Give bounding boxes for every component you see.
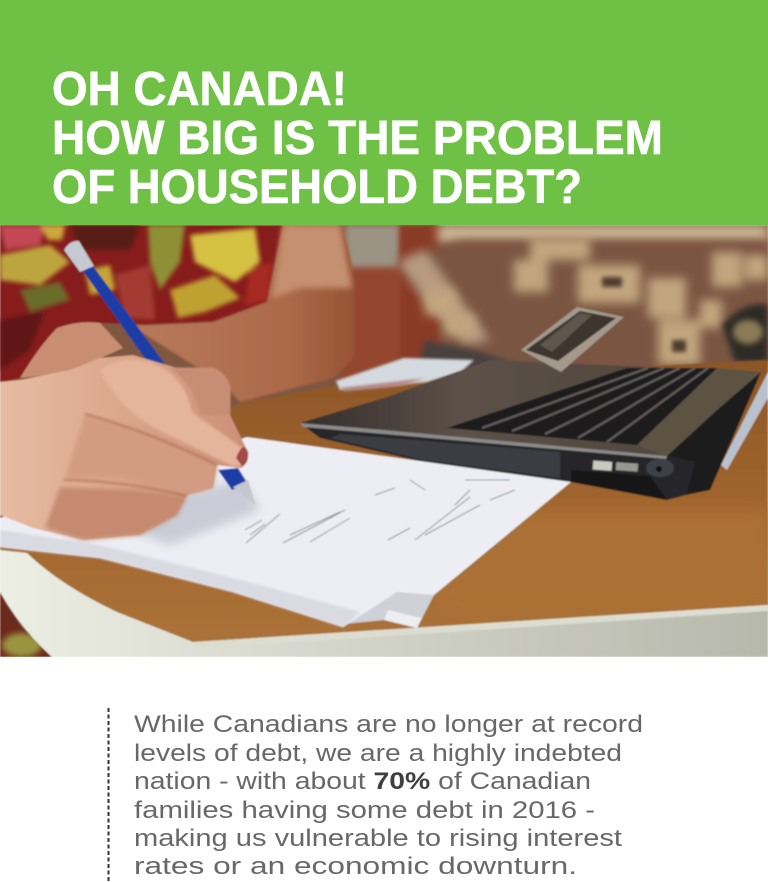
- middle finger shade: [65, 415, 217, 495]
- title: OH CANADA!: [52, 63, 347, 116]
- title: HOW BIG IS THE PROBLEM: [52, 112, 663, 165]
- dotted divider: [108, 708, 110, 882]
- index finger: [100, 360, 248, 466]
- intro text: levels of debt, we are a highly indebted: [134, 740, 622, 767]
- intro text: nation - with about 70% of Canadian: [134, 768, 591, 795]
- hand body: [0, 355, 248, 540]
- thumb behind pen: [20, 322, 123, 378]
- intro text: making us vulnerable to rising interest: [134, 825, 622, 852]
- title: OF HOUSEHOLD DEBT?: [52, 161, 582, 214]
- red floral shirt: [0, 225, 283, 657]
- notepad: [336, 358, 474, 390]
- writing hand: [0, 322, 248, 540]
- lower fingers shade: [45, 487, 187, 540]
- DVD label: [593, 461, 612, 471]
- upper arm: [130, 225, 354, 402]
- thumb tip shade: [170, 368, 230, 415]
- paper stack: [0, 437, 571, 628]
- intro paragraph block: [108, 708, 643, 882]
- background wall and sofa: [0, 225, 768, 657]
- white table rim: [0, 550, 768, 657]
- palm rest: [637, 368, 761, 457]
- laptop front side: [306, 426, 696, 500]
- phone: [521, 307, 624, 372]
- header banner: [0, 0, 768, 225]
- laptop lid edge: [667, 372, 761, 495]
- intro text: rates or an economic downturn.: [134, 853, 577, 880]
- lower-left shirt corner: [0, 590, 52, 657]
- title: [52, 63, 663, 214]
- laptop: [300, 358, 768, 500]
- table top: [0, 360, 768, 645]
- intro text: While Canadians are no longer at record: [134, 711, 643, 738]
- intro text: [134, 711, 643, 880]
- pen: [64, 241, 256, 506]
- fingernail: [236, 447, 248, 466]
- photo: hand writing on paper beside a laptop: [0, 225, 768, 657]
- intro text: families having some debt in 2016 -: [134, 797, 595, 824]
- laptop deck: [300, 360, 668, 456]
- keyboard: [447, 368, 717, 445]
- finger creases: [63, 414, 217, 496]
- pen scribbles: [245, 480, 515, 543]
